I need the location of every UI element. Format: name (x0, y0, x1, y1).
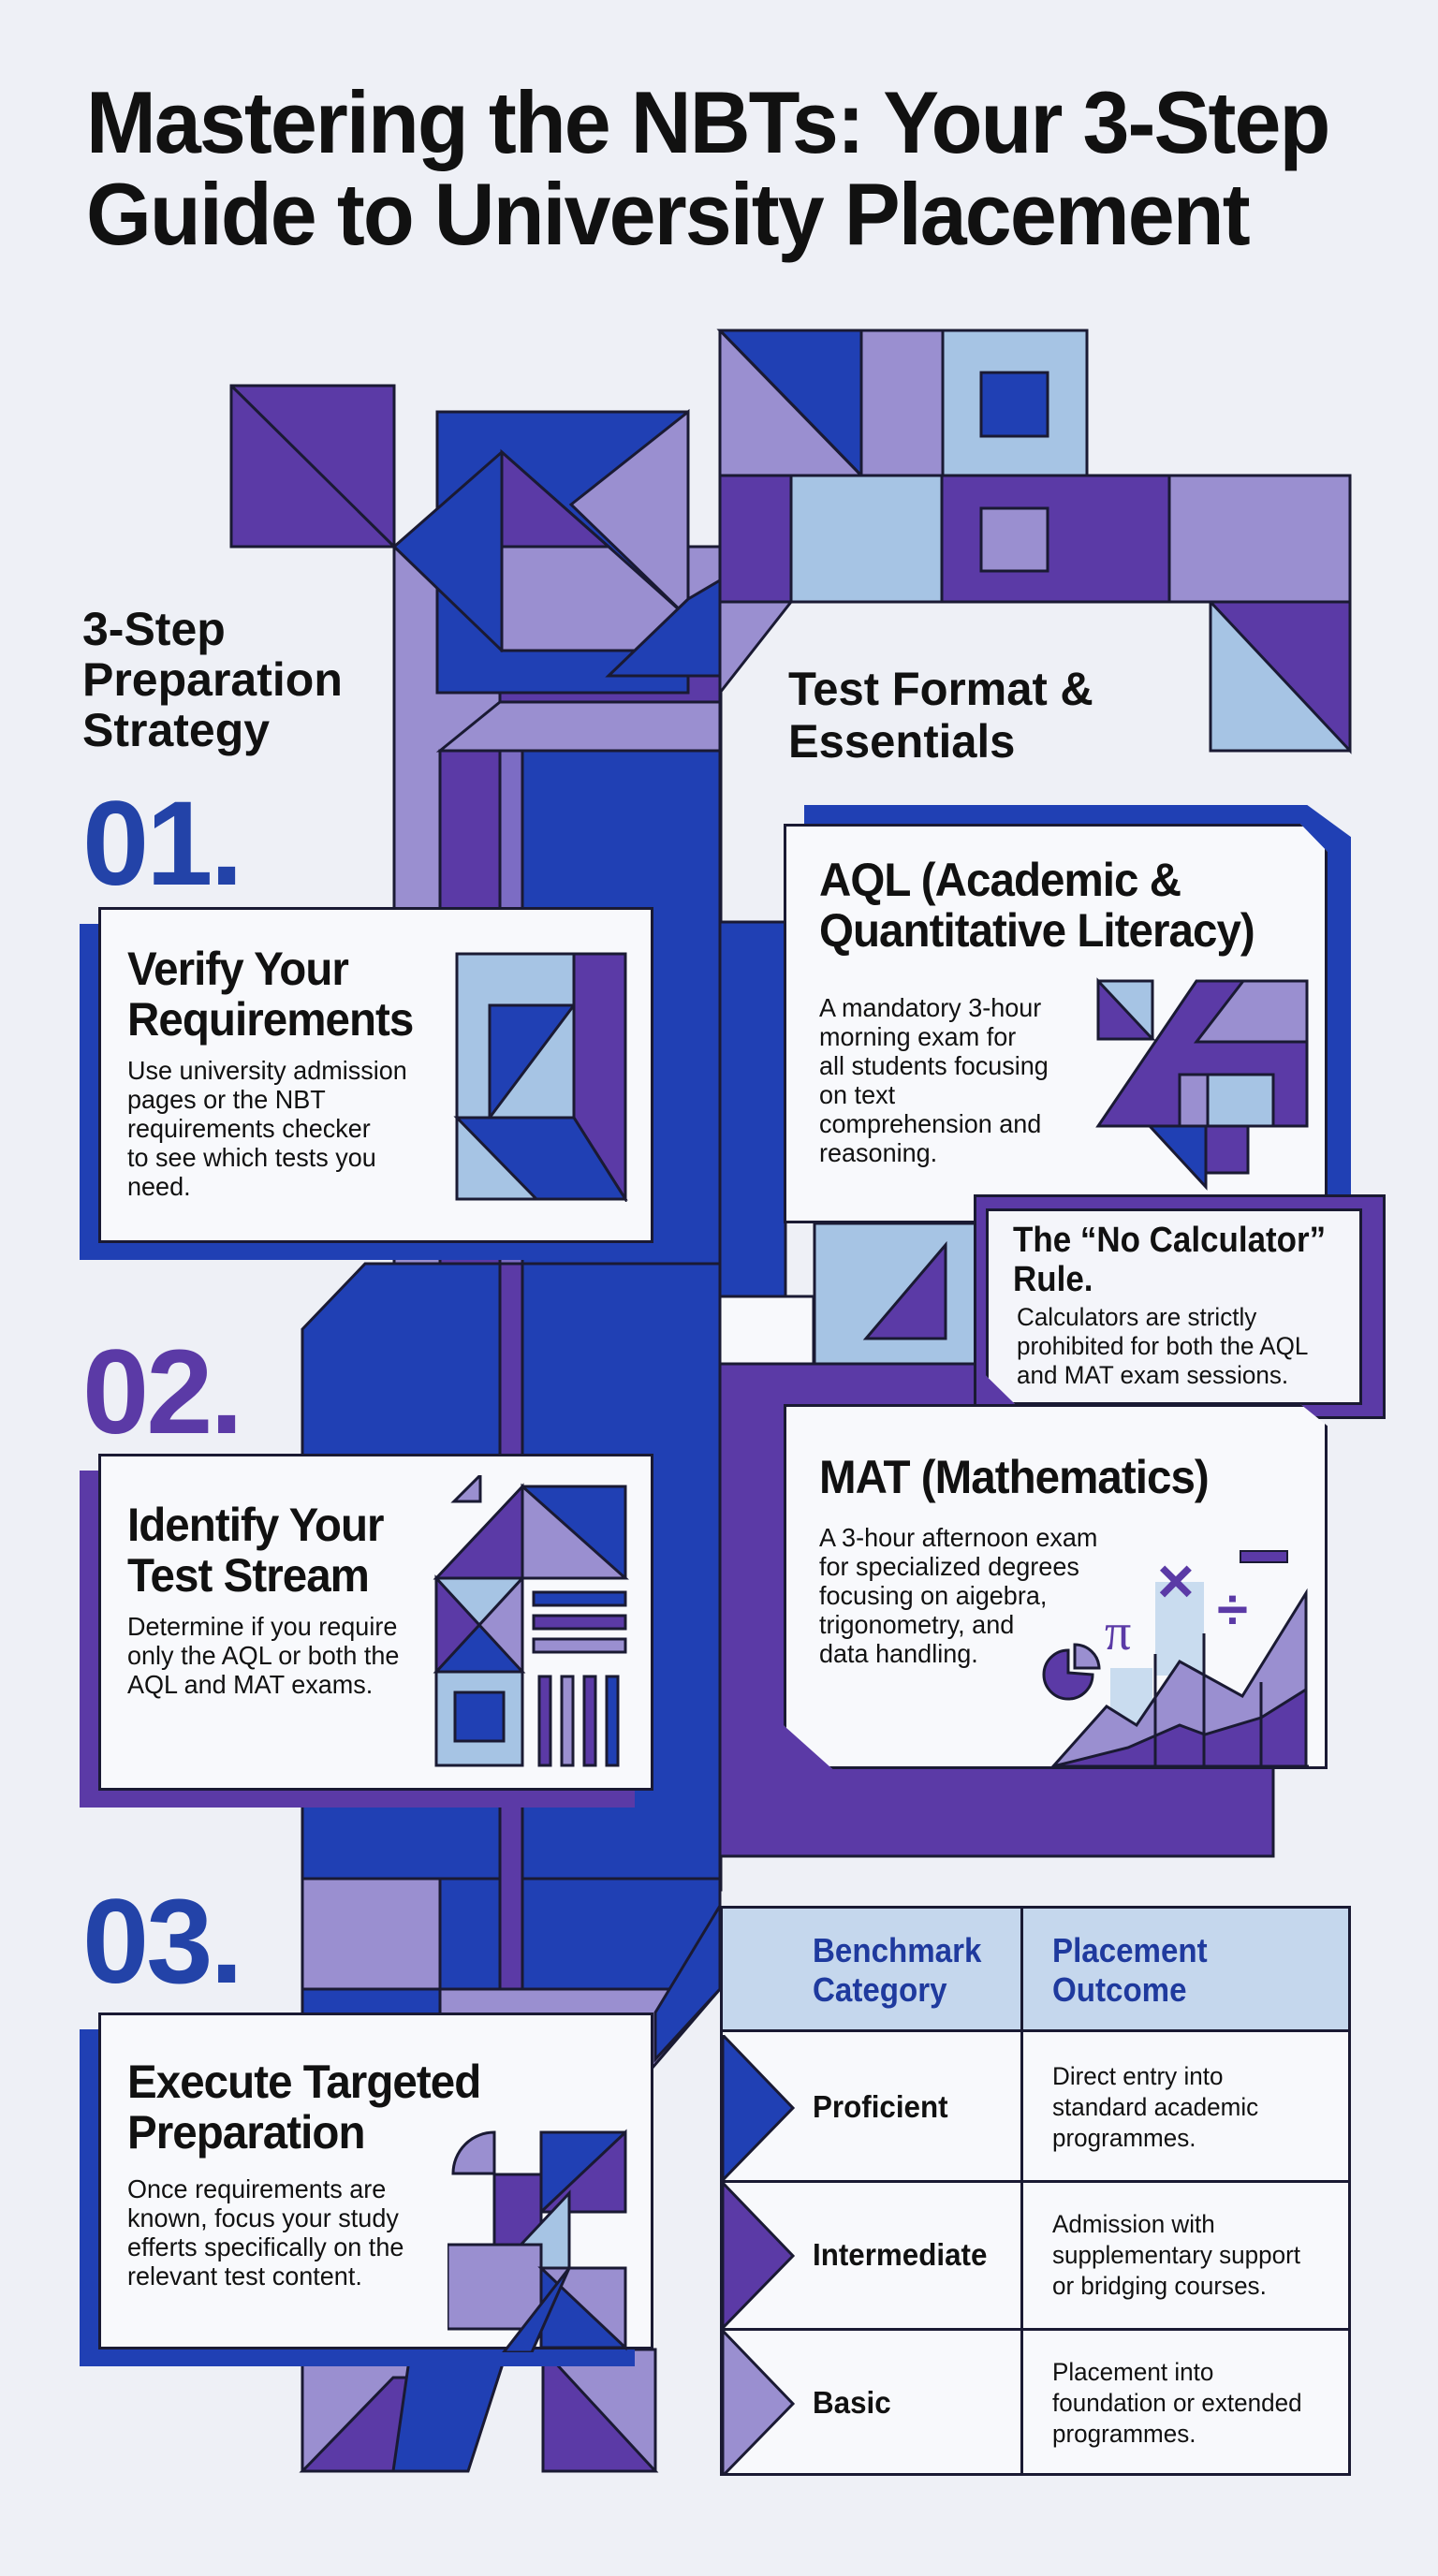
row: Proficient: Proficient (813, 2089, 948, 2124)
icon: arrow mosaic (448, 2129, 627, 2352)
row: Proficient: standard academic (1052, 2093, 1258, 2121)
AQL body: all students focusing (819, 1051, 1049, 1080)
card 1 heading (127, 943, 413, 1046)
no calc heading (1013, 1226, 1324, 1292)
MAT body: focusing on aigebra, (819, 1581, 1047, 1610)
heading: Test Format & Essentials (788, 663, 1093, 768)
card 2 body (127, 1612, 399, 1699)
card: AQL (784, 805, 1351, 1223)
table header: Outcome (1052, 1970, 1187, 2009)
heading: Test Format & Essentials: Test Format & (788, 663, 1093, 715)
AQL body: A mandatory 3-hour (819, 993, 1041, 1022)
card: No Calculator rule (974, 1194, 1386, 1419)
card 1 body: requirements checker (127, 1114, 371, 1143)
icon: document layout (433, 1475, 629, 1767)
MAT body: for specialized degrees (819, 1552, 1079, 1581)
heading: 3-Step Preparation Strategy (82, 603, 343, 756)
card 1 body: need. (127, 1172, 191, 1201)
card 1 body (127, 1056, 407, 1201)
AQL body: comprehension and (819, 1109, 1041, 1138)
card 3 body: efferts specifically on the (127, 2232, 404, 2261)
card 1 body: Use university admission (127, 1056, 407, 1085)
no calc body (1018, 1307, 1307, 1383)
AQL body: reasoning. (819, 1138, 937, 1167)
card 2 body: Determine if you require (127, 1612, 397, 1641)
top left mosaic (231, 386, 394, 547)
title: Mastering the NBTs: Your 3-Step (86, 73, 1328, 171)
card 1 body: to see which tests you (127, 1143, 376, 1172)
row: Intermediate (723, 2183, 1300, 2328)
icon: math chart (1043, 1545, 1309, 1766)
number 03: 03. (82, 1875, 241, 2009)
table header: Category (813, 1970, 947, 2009)
card 1 (98, 907, 653, 1243)
MAT body: data handling. (819, 1639, 978, 1668)
title: Guide to University Placement (86, 165, 1249, 263)
row: Basic: programmes. (1052, 2420, 1196, 2448)
AQL heading: AQL (Academic & (819, 854, 1181, 906)
icon: 3D frame (453, 953, 628, 1202)
row: Basic: Basic (813, 2385, 891, 2420)
AQL body: on text (819, 1080, 895, 1109)
no calc body: and MAT exam sessions. (1017, 1361, 1288, 1389)
MAT body: trigonometry, and (819, 1610, 1014, 1639)
card 3 (98, 2012, 653, 2349)
no calc body: Calculators are strictly (1017, 1303, 1256, 1331)
AQL body (819, 998, 1047, 1167)
row: Intermediate: Admission with (1052, 2210, 1215, 2238)
row: Intermediate: or bridging courses. (1052, 2272, 1267, 2300)
card 1 heading: Requirements (127, 993, 413, 1046)
card: MAT (784, 1404, 1328, 1769)
number 01: 01. (82, 777, 241, 911)
card 2 body: AQL and MAT exams. (127, 1670, 373, 1699)
icon: math chart: π (1105, 1603, 1131, 1661)
row: Intermediate: Intermediate (813, 2237, 987, 2272)
AQL heading (820, 861, 1253, 957)
MAT body (819, 1528, 1096, 1668)
title (86, 73, 1328, 263)
icon: tangram (1095, 977, 1309, 1191)
card 3 body: relevant test content. (127, 2261, 362, 2291)
card 3 heading: Preparation (127, 2106, 365, 2159)
row: Proficient (723, 2035, 1258, 2180)
card 1 body: pages or the NBT (127, 1085, 326, 1114)
column base (394, 547, 721, 1890)
row: Basic: Placement into (1052, 2358, 1213, 2386)
top right mosaic (720, 330, 943, 476)
card 2 heading: Test Stream (127, 1549, 369, 1602)
card 3 heading (127, 2056, 480, 2159)
card 3 body (127, 2174, 404, 2291)
table header (723, 1909, 1348, 2032)
row: Intermediate: supplementary support (1052, 2241, 1300, 2269)
table header: Benchmark (813, 1931, 981, 1969)
card 1 heading: Verify Your (127, 943, 348, 995)
no calc body: prohibited for both the AQL (1017, 1332, 1308, 1360)
mid right fills (720, 922, 785, 1296)
row: Basic (723, 2331, 1302, 2473)
card 3 body: known, focus your study (127, 2203, 399, 2232)
row: Proficient: Direct entry into (1052, 2062, 1223, 2090)
heading: 3-Step Preparation Strategy: Preparation (82, 653, 343, 706)
heading: 3-Step Preparation Strategy: Strategy (82, 704, 270, 756)
MAT heading: MAT (Mathematics) (819, 1451, 1209, 1503)
icon: math chart: ÷ (1217, 1578, 1248, 1641)
number 02: 02. (82, 1325, 241, 1459)
card 2 (98, 1454, 653, 1791)
table: benchmark categories (720, 1906, 1351, 2476)
card 2 body: only the AQL or both the (127, 1641, 399, 1670)
row: Basic: foundation or extended (1052, 2389, 1302, 2417)
table header: Placement (1052, 1931, 1208, 1969)
card 2 heading: Identify Your (127, 1499, 384, 1551)
card 3 heading: Execute Targeted (127, 2056, 480, 2108)
bottom left shapes (302, 2349, 438, 2471)
no calc heading: The “No Calculator” (1013, 1221, 1326, 1260)
heading: 3-Step Preparation Strategy: 3-Step (82, 603, 226, 655)
AQL body: morning exam for (819, 1022, 1016, 1051)
AQL heading: Quantitative Literacy) (819, 904, 1255, 957)
icon: math chart: × (1157, 1545, 1195, 1617)
row: Proficient: programmes. (1052, 2124, 1196, 2152)
card 3 body: Once requirements are (127, 2174, 386, 2203)
MAT body: A 3-hour afternoon exam (819, 1523, 1097, 1552)
no calc heading: Rule. (1013, 1260, 1093, 1299)
card 2 heading (127, 1499, 384, 1602)
heading: Test Format & Essentials: Essentials (788, 715, 1015, 768)
